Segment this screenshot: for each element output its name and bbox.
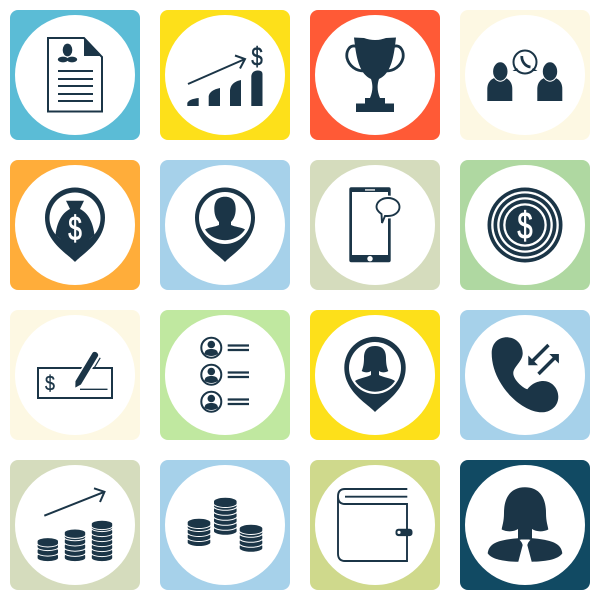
panel: trophy: [310, 10, 440, 140]
icon: rising bars with dollar: $: [251, 42, 263, 71]
panel: incoming outgoing call: [460, 310, 590, 440]
icon: coin stacks with rising arrow: [37, 488, 113, 562]
panel: businesswoman: [460, 460, 590, 590]
panel: person location: [160, 160, 290, 290]
icon: money bag pin: $: [68, 210, 82, 248]
panel: signed cheque: [10, 310, 140, 440]
panel: coin growth: [10, 460, 140, 590]
icon: telephone handset with arrows: [492, 337, 559, 412]
icon: businesswoman portrait: [488, 487, 562, 562]
icon: three coin stacks: [187, 497, 263, 552]
panel: growth chart: [160, 10, 290, 140]
icon: trophy cup: [347, 38, 403, 112]
panel: resume: [10, 10, 140, 140]
panel: woman location: [310, 310, 440, 440]
icon: person pin: [195, 188, 255, 262]
icon: two people with call bubble: [487, 50, 562, 101]
panel: contact list: [160, 310, 290, 440]
panel: phone conversation: [460, 10, 590, 140]
panel: coin stacks: [160, 460, 290, 590]
icon: resume document: [48, 38, 102, 112]
panel: mobile message: [310, 160, 440, 290]
panel: wallet: [310, 460, 440, 590]
icon: people list: [201, 338, 249, 412]
panel: money location: [10, 160, 140, 290]
panel: dollar target: [460, 160, 590, 290]
icon: smartphone with speech bubble: [349, 187, 400, 262]
icon: concentric dollar coin: $: [517, 205, 533, 248]
icon: cheque and pen: $: [45, 372, 55, 396]
icon: woman pin: [344, 337, 406, 412]
icon: wallet: [338, 489, 412, 561]
